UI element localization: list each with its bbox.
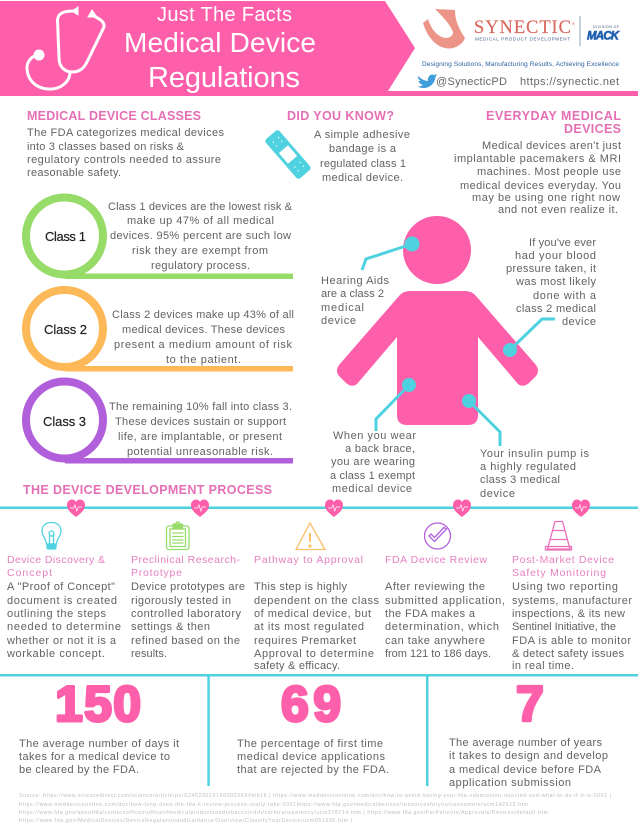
stat: 69 percent: 69	[281, 676, 341, 732]
process step 3	[254, 554, 380, 672]
process step 2: settings & then	[131, 621, 210, 633]
sources footnote: https://www.meddeviceonline.com/doc/how-long-does-the-fda-k-review-process-really-take-0001https://www.fda.gov/medicaldevices/resourcesforyou/consumers/ucm142523.htm	[19, 802, 528, 808]
process step 3: Pathway to Approval	[254, 554, 363, 566]
process step 3: safety & efficacy.	[254, 660, 340, 672]
process step 2: refined based on the	[131, 635, 240, 647]
text: classes intro: The FDA categorizes medical devices	[27, 127, 224, 139]
text: everyday devices: implantable pacemakers & MRI	[454, 153, 621, 165]
logo: Synectic: SYNECTIC	[474, 18, 571, 38]
callout: hearing aids: are a class 2	[321, 288, 384, 300]
heading: everyday medical devices: EVERYDAY MEDICAL	[486, 109, 621, 123]
callout: back brace: a back brace,	[345, 443, 415, 455]
title	[124, 4, 316, 94]
process step 4: FDA Device Review	[385, 554, 487, 566]
text: classes intro: into 3 classes based on risks &	[27, 141, 185, 153]
callout: back brace: a class 1 exempt	[330, 470, 415, 482]
callout: blood pressure: If you've ever	[529, 237, 596, 249]
panel: class 1: devices. 95% percent are such low	[110, 230, 291, 242]
process step 3: of medical device, but	[254, 608, 371, 620]
panel: class 3	[26, 382, 293, 464]
stat: 69 percent: that are rejected by the FDA.	[237, 764, 389, 776]
process step 1: document is created	[7, 595, 117, 607]
process step 5: inspections, & its new	[512, 608, 625, 620]
callout: blood pressure: had your blood	[515, 250, 596, 262]
process step 2: rigorously tested in	[131, 595, 231, 607]
stat: 69 percent: medical device applications	[237, 751, 386, 763]
icon: twitter bird	[418, 74, 437, 88]
title: Regulations	[148, 62, 300, 94]
callout: insulin pump: class 3 medical	[480, 474, 560, 486]
heading: everyday medical devices: DEVICES	[564, 122, 621, 136]
panel: class 1: risk they are exempt from	[132, 245, 268, 257]
callout: insulin pump: a highly regulated	[480, 461, 576, 473]
stat: 69 percent	[237, 676, 389, 776]
text: did you know: A simple adhesive	[314, 129, 410, 141]
process step 5: Post-Market Device	[512, 554, 614, 566]
process step 5: FDA is able to monitor	[512, 635, 631, 647]
process step 4: submitted application,	[385, 595, 505, 607]
process step 3: at its most regulated	[254, 621, 364, 633]
process step 1: workable concept.	[6, 648, 105, 660]
process step 2	[131, 554, 245, 660]
process step 2: Device prototypes are	[131, 581, 245, 593]
process step 3: This step is highly	[254, 581, 348, 593]
panel: class 3: life, are implantable, or present	[118, 431, 282, 443]
panel: class 2: Class 2	[44, 322, 87, 337]
logo: Synectic: MEDICAL PRODUCT DEVELOPMENT	[475, 36, 570, 42]
logo: Synectic: DIVISION OF	[593, 25, 619, 29]
process step 5: in real time.	[512, 660, 574, 672]
panel: class 1: Class 1	[45, 229, 86, 244]
stat: 150 days: be cleared by the FDA.	[19, 764, 139, 776]
sources footnote	[19, 793, 611, 824]
process step 5: Using two reporting	[512, 581, 618, 593]
panel: class 2: medical devices. These devices	[122, 324, 286, 336]
logo: Synectic: MACK	[587, 30, 620, 42]
panel: class 2: Class 2 devices make up 43% of all	[112, 309, 294, 321]
text: everyday devices	[454, 140, 621, 216]
stat: 7 years: a medical device before FDA	[449, 764, 602, 776]
text: classes intro: regulatory controls needed to assure	[27, 154, 221, 166]
process step 1: A "Proof of Concept"	[7, 581, 115, 593]
human figure diagram	[337, 216, 555, 446]
text: did you know: bandage is a	[329, 143, 397, 155]
text: everyday devices: may be using one right now	[472, 192, 620, 204]
process timeline hearts	[67, 500, 590, 517]
icon: traffic cone	[546, 522, 572, 550]
icon: bandage	[264, 129, 312, 180]
text: everyday devices: medical devices everyday. You	[460, 180, 621, 192]
callout: blood pressure: class 2 medical	[516, 303, 596, 315]
panel: class 2: to the patient.	[166, 354, 241, 366]
tagline: Designing Solutions, Manufacturing Results, Achieving Excellence	[422, 61, 619, 68]
stat: 150 days: 150	[55, 676, 141, 732]
heading: device development process: THE DEVICE DEVELOPMENT PROCESS	[23, 483, 272, 497]
stat: 7 years	[449, 676, 608, 789]
process step 4: can take anywhere	[385, 635, 485, 647]
logo: Synectic: ®	[572, 21, 575, 26]
social handles	[436, 76, 619, 88]
social handles: @SynecticPD	[436, 76, 507, 88]
callout: blood pressure: pressure taken, it	[506, 263, 596, 275]
panel: class 3: These devices sustain or support	[115, 416, 286, 428]
process step 5	[512, 554, 632, 672]
heading: medical device classes: MEDICAL DEVICE CLASSES	[27, 109, 201, 123]
panel: class 3: The remaining 10% fall into class 3.	[109, 401, 292, 413]
text: did you know: medical device.	[322, 172, 403, 184]
process step 2: Preclinical Research-	[131, 554, 240, 566]
process step 1	[6, 554, 121, 660]
panel: class 1	[26, 198, 293, 279]
callout: back brace: When you wear	[333, 430, 416, 442]
process step 2: Prototype	[131, 567, 182, 579]
process step 4: from 121 to 186 days.	[385, 648, 491, 660]
callout: insulin pump	[480, 448, 590, 500]
title: Medical Device	[124, 27, 316, 58]
icon: stethoscope	[27, 7, 104, 89]
panel: class 3: potential unreasonable risk.	[127, 446, 273, 458]
process step 5: Safety Monitoring	[512, 567, 606, 579]
process step 1: needed to determine	[7, 621, 121, 633]
callout: hearing aids: device	[321, 315, 356, 327]
header banner	[0, 1, 638, 96]
stat: 150 days	[19, 676, 179, 776]
callout: hearing aids	[321, 275, 390, 327]
stat: 7 years: 7	[516, 676, 544, 732]
callout: blood pressure: device	[562, 316, 596, 328]
panel: class 2	[26, 290, 294, 372]
text: everyday devices: Medical devices aren't just	[482, 140, 621, 152]
callout: insulin pump: device	[480, 488, 515, 500]
process step 2: results.	[131, 648, 167, 660]
logo: Synectic	[423, 9, 620, 49]
title: Just The Facts	[157, 4, 292, 26]
callout: back brace: medical device	[332, 483, 412, 495]
process step 4: determination, which	[385, 621, 499, 633]
process step 3: dependent on the class	[254, 595, 380, 607]
heading: everyday medical devices	[486, 109, 621, 136]
icon: clipboard	[166, 522, 189, 550]
process step 3: requires Premarket	[254, 635, 356, 647]
callout: blood pressure	[506, 237, 597, 328]
stat: 7 years: The average number of years	[449, 737, 602, 749]
process step 2: controlled laboratory	[131, 608, 242, 620]
text: did you know	[314, 129, 410, 184]
panel: class 1: make up 47% of all medical	[127, 215, 274, 227]
panel: class 3: Class 3	[43, 414, 86, 429]
social handles: https://synectic.net	[520, 76, 619, 88]
callout: back brace	[330, 430, 416, 495]
icon: check circle	[424, 523, 450, 549]
process step 5: Sentinel Initiative, the	[512, 621, 616, 633]
sources footnote: https://www.fda.gov/MedicalDevices/DeviceRegulationandGuidance/Overview/ClassifyYourDevice/ucm051530.htm |	[19, 818, 352, 824]
process step 1: outlining the steps	[7, 608, 106, 620]
panel: class 1: Class 1 devices are the lowest risk &	[108, 201, 293, 213]
callout: insulin pump: Your insulin pump is	[480, 448, 590, 460]
text: did you know: regulated class 1	[320, 158, 406, 170]
process step 1: Concept	[7, 567, 52, 579]
text: everyday devices: and not even realize it.	[498, 204, 618, 216]
heading: did you know: DID YOU KNOW?	[287, 109, 394, 123]
stat: 150 days: takes for a medical device to	[19, 751, 170, 763]
process step 3: Approval to determine	[254, 648, 374, 660]
callout: blood pressure: done with a	[533, 290, 597, 302]
icon: light bulb	[42, 522, 61, 549]
process step 4	[385, 554, 505, 660]
process step 1: whether or not it is a	[6, 635, 117, 647]
stat: 150 days: The average number of days it	[19, 738, 179, 750]
icon: warning triangle	[296, 523, 325, 550]
process step 1: Device Discovery &	[7, 554, 105, 566]
text: classes intro	[27, 127, 224, 179]
stat: 7 years: application submission	[449, 777, 571, 789]
panel: class 2: present a medium amount of risk	[114, 339, 292, 351]
callout: hearing aids: medical	[321, 302, 364, 314]
text: classes intro: reasonable safety.	[27, 167, 121, 179]
stat: 7 years: it takes to design and develop	[449, 750, 608, 762]
process step 5: & detect safety issues	[512, 648, 624, 660]
process step 4: After reviewing the	[385, 581, 485, 593]
process step 5: systems, manufacturer	[512, 595, 632, 607]
stat: 69 percent: The percentage of first time	[237, 738, 383, 750]
text: everyday devices: machines. Most people use	[477, 166, 621, 178]
callout: blood pressure: was most likely	[515, 276, 596, 288]
sources footnote: https://www.fda.gov/aboutfda/centersoffices/officeofmedicalproductsandtobacco/cdrh/cdrhtransparency/ucm378714.htm | https://www.fda.gov/ForPatients/Approvals/Devices/default.htm	[19, 810, 548, 816]
callout: back brace: you are wearing	[331, 456, 415, 468]
process step 4: the FDA makes a	[385, 608, 476, 620]
callout: hearing aids: Hearing Aids	[321, 275, 390, 287]
sources footnote: Source: https://www.sciencedirect.com/science/article/pii/S2452302X16000036X#bib16 | https://www.meddeviceonline.com/doc/how-to-avoid-having-your-fda-submission-rejected-and-what-to-do-if-it-is-0001 |	[19, 793, 611, 799]
panel: class 1: regulatory process.	[151, 260, 250, 272]
